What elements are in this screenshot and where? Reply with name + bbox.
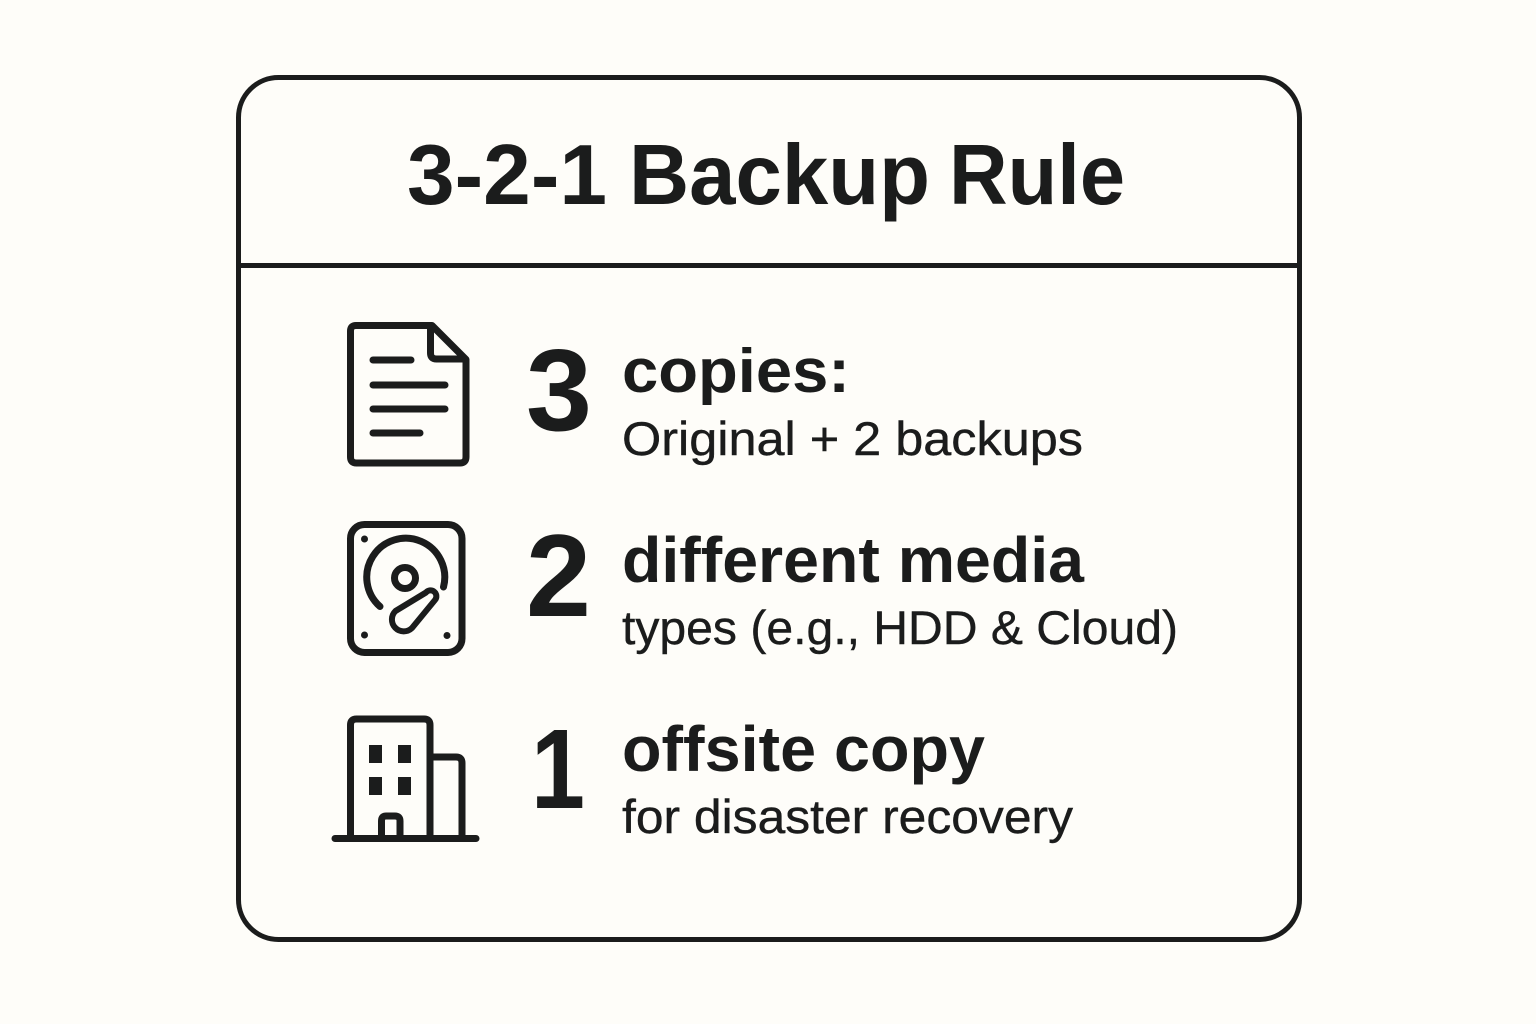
description: media types: types (e.g., HDD & Cloud) <box>622 601 1178 654</box>
label: different media: different media <box>622 524 1084 596</box>
title: Rule <box>949 128 1125 223</box>
row: 1 offsite copy <box>335 706 1074 843</box>
row: 2 different media <box>350 510 1178 654</box>
icon: hard drive <box>350 524 462 652</box>
description: original plus backups: Original + 2 backups <box>622 412 1083 465</box>
number 1: 1 <box>531 706 585 832</box>
description: disaster recovery: for disaster recovery <box>622 790 1074 843</box>
number 3: 3 <box>526 325 592 455</box>
label: copies: copies: <box>622 337 850 406</box>
icon: document <box>350 326 466 463</box>
icon: office building <box>335 719 476 838</box>
title: Backup <box>629 128 930 223</box>
title: 3-2-1 <box>407 128 607 223</box>
number 2: 2 <box>526 510 591 641</box>
panel: backup rule card <box>238 78 1300 940</box>
label: offsite copy: offsite copy <box>622 713 985 785</box>
row: 3 copies <box>350 325 1083 465</box>
